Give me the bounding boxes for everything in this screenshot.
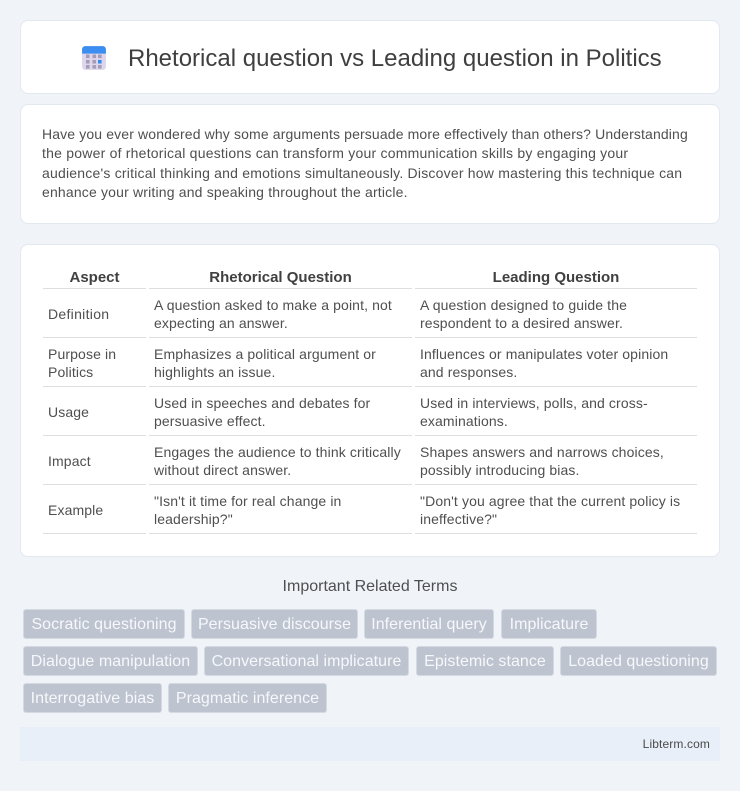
tag: Persuasive discourse (198, 616, 351, 633)
footer attribution: Libterm.com (643, 737, 710, 751)
row: Definition: Definition (48, 306, 109, 322)
tag (168, 683, 327, 713)
row: Impact: Impact (48, 453, 91, 469)
row: Definition: A question asked to make a point, not (154, 297, 392, 313)
tag: Implicature (510, 616, 588, 633)
tag (416, 646, 554, 676)
row: Example: "Isn't it time for real change in (154, 493, 341, 509)
tag (23, 646, 198, 676)
row: Purpose in Politics: highlights an issue. (154, 364, 275, 380)
panel: introduction (20, 104, 720, 224)
heading: related terms: Important Related Terms (283, 578, 457, 595)
tag (501, 609, 597, 639)
row: Purpose in Politics: and responses. (420, 364, 517, 380)
row: Purpose in Politics: Purpose in (48, 346, 116, 362)
row: Definition: respondent to a desired answer. (420, 315, 623, 331)
intro text: audience's critical thinking and emotions simultaneously. Discover how mastering this technique can (42, 165, 682, 181)
table header: Aspect: Aspect (69, 269, 120, 286)
intro text: the power of rhetorical questions can transform your communication skills by engaging your (42, 145, 628, 161)
row: Impact: Engages the audience to think critically (154, 444, 401, 460)
row: Usage: examinations. (420, 413, 508, 429)
footer (20, 727, 720, 761)
row: Impact: Shapes answers and narrows choices, (420, 444, 664, 460)
icon: calendar (82, 46, 106, 70)
panel: header (20, 20, 720, 94)
row: Example: leadership?" (154, 511, 233, 527)
table header: Rhetorical Question: Rhetorical Question (209, 269, 352, 286)
tag (191, 609, 358, 639)
row: Usage: Used in interviews, polls, and cross- (420, 395, 648, 411)
tag: Dialogue manipulation (31, 653, 190, 670)
intro text (42, 126, 688, 200)
row: Usage: Usage (48, 404, 89, 420)
tag (560, 646, 717, 676)
panel: comparison table (20, 244, 720, 557)
row: Example (48, 493, 680, 527)
row: Usage (48, 395, 648, 429)
tag (204, 646, 409, 676)
row: Usage: persuasive effect. (154, 413, 266, 429)
row: Purpose in Politics: Emphasizes a political argument or (154, 346, 376, 362)
title: Rhetorical question vs Leading question in Politics (128, 45, 662, 72)
row: Example: Example (48, 502, 103, 518)
tag (23, 683, 162, 713)
row: Example: ineffective?" (420, 511, 497, 527)
row: Definition: A question designed to guide the (420, 297, 627, 313)
tag group: related terms (23, 609, 717, 713)
tag: Loaded questioning (568, 653, 709, 670)
tag: Pragmatic inference (176, 690, 319, 707)
tag (23, 609, 185, 639)
tag: Conversational implicature (212, 653, 401, 670)
row: Example: "Don't you agree that the current policy is (420, 493, 680, 509)
intro text: Have you ever wondered why some arguments persuade more effectively than others? Understanding (42, 126, 688, 142)
row: Definition (48, 297, 627, 331)
row: Purpose in Politics: Politics (48, 364, 93, 380)
row: Impact: possibly introducing bias. (420, 462, 580, 478)
tag: Inferential query (371, 616, 487, 633)
row: Impact: without direct answer. (154, 462, 291, 478)
tag: Epistemic stance (424, 653, 546, 670)
row: Impact (48, 444, 664, 478)
tag: Socratic questioning (31, 616, 177, 633)
row: Definition: expecting an answer. (154, 315, 288, 331)
intro text: enhance your writing and speaking throughout the article. (42, 184, 408, 200)
row: Purpose in Politics (48, 346, 668, 380)
table header: Leading Question: Leading Question (493, 269, 619, 286)
tag: Interrogative bias (31, 690, 154, 707)
row: Purpose in Politics: Influences or manipulates voter opinion (420, 346, 668, 362)
row: Usage: Used in speeches and debates for (154, 395, 370, 411)
tag (364, 609, 494, 639)
